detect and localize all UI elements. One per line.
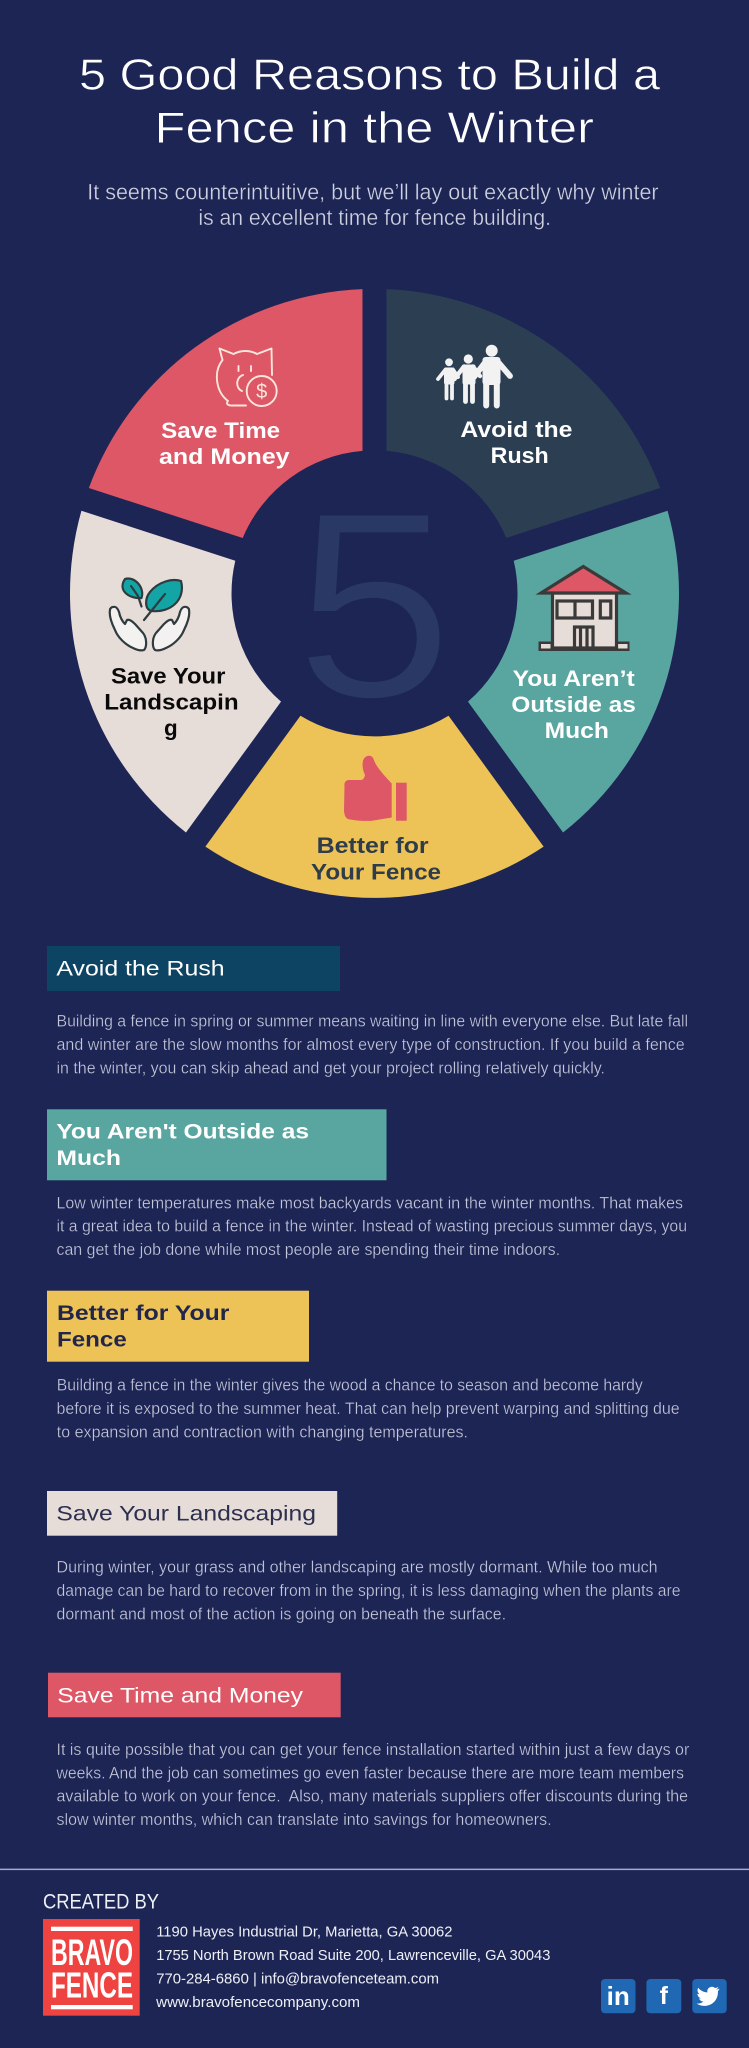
title: Fence in the Winter (154, 104, 594, 153)
text: you aren't outside as much: can get the job done while most people are spending their time indoors. (56, 1240, 560, 1259)
icon: piggy bank with coin (217, 348, 277, 406)
section: save your landscaping (47, 1491, 680, 1623)
label: save your landscaping: g (164, 716, 178, 740)
icon: twitter (692, 1979, 727, 2013)
section: avoid the rush (47, 946, 688, 1077)
heading: better for your fence: Better for Your (57, 1301, 230, 1325)
text: save your landscaping: During winter, your grass and other landscaping are mostly dormant. While too much (56, 1558, 658, 1577)
subtitle (87, 179, 659, 230)
heading: you aren't outside as much (47, 1109, 386, 1180)
text: you aren't outside as much: it a great idea to build a fence in the winter. Instead of wasting precious summer days, you (56, 1217, 687, 1236)
heading: you aren't outside as much: You Aren't Outside as (56, 1119, 309, 1143)
text: save time and money: available to work on your fence. Also, many materials suppliers offer discounts during the (56, 1787, 688, 1806)
section: better for your fence (47, 1291, 680, 1442)
text: avoid the rush: Building a fence in spring or summer means waiting in line with everyone else. But late fall (56, 1012, 688, 1031)
text: better for your fence (56, 1376, 680, 1442)
section: save time and money (48, 1673, 690, 1829)
label: you aren't outside as much: Outside as (511, 692, 636, 717)
label: you aren't outside as much: Much (545, 718, 609, 743)
label: avoid the rush: Rush (491, 443, 549, 468)
label: better for your fence: Better for (317, 833, 429, 858)
wheel slice: better for your fence (176, 645, 544, 1007)
icon: facebook: f (660, 1982, 669, 2010)
heading: save time and money (48, 1673, 341, 1717)
text: avoid the rush (56, 1012, 688, 1077)
subtitle: It seems counterintuitive, but we’ll lay out exactly why winter (87, 179, 659, 204)
text: better for your fence: before it is exposed to the summer heat. That can help prevent warping and splitting due (56, 1399, 680, 1418)
wheel slice: save your landscaping (0, 470, 332, 832)
text: better for your fence: to expansion and contraction with changing temperatures. (57, 1423, 468, 1442)
contact details (155, 1924, 550, 2011)
label: better for your fence: Your Fence (311, 860, 441, 884)
icon: thumbs up (344, 756, 407, 821)
label: save time and money: Save Time (161, 418, 280, 443)
label: save time and money: and Money (159, 444, 290, 469)
icon: family (438, 345, 510, 406)
text: save your landscaping: damage can be hard to recover from in the spring, it is less damaging when the plants are (56, 1581, 680, 1600)
text: you aren't outside as much: Low winter temperatures make most backyards vacant in the winter months. That makes (56, 1193, 683, 1212)
heading: save your landscaping (47, 1491, 337, 1536)
text: save time and money: It is quite possible that you can get your fence installation started within just a few days or (56, 1740, 690, 1759)
icon: linkedin: in (607, 1981, 630, 2011)
heading: avoid the rush: Avoid the Rush (56, 957, 225, 981)
label: save time and money (159, 418, 290, 469)
logo: bravo fence: FENCE (51, 1964, 133, 2006)
wheel slice: you aren't outside as much (431, 511, 749, 848)
title: 5 Good Reasons to Build a (79, 50, 661, 100)
label: avoid the rush (460, 417, 572, 468)
text: better for your fence: Building a fence in the winter gives the wood a chance to season and become hardy (57, 1376, 643, 1395)
icon: hands and leaves (110, 579, 189, 650)
footer (43, 1891, 727, 2016)
wheel slice: avoid the rush (386, 289, 660, 538)
title (79, 50, 661, 153)
text: avoid the rush: in the winter, you can skip ahead and get your project rolling relatively quickly. (56, 1058, 605, 1077)
label: save your landscaping (104, 663, 239, 740)
heading: save your landscaping: Save Your Landscaping (56, 1502, 316, 1526)
section: you aren't outside as much (47, 1109, 687, 1259)
text: save time and money: weeks. And the job can sometimes go even faster because there are more team members (56, 1763, 684, 1782)
text: save time and money (56, 1740, 690, 1829)
icon: house (538, 566, 630, 651)
logo: bravo fence: BRAVO (51, 1932, 133, 1973)
text: you aren't outside as much (56, 1193, 687, 1259)
text: save your landscaping: dormant and most of the action is going on beneath the surface. (56, 1604, 506, 1623)
wheel diagram (0, 228, 749, 1007)
logo: bravo fence (43, 1919, 140, 2016)
heading: you aren't outside as much: Much (56, 1146, 121, 1170)
heading: better for your fence (47, 1291, 309, 1362)
heading: avoid the rush (47, 946, 340, 991)
heading: save time and money: Save Time and Money (57, 1683, 303, 1707)
label: save your landscaping: Landscapin (104, 690, 239, 714)
icon: linkedin (601, 1979, 636, 2013)
label: save your landscaping: Save Your (111, 663, 226, 688)
big number 5: 5 (295, 457, 453, 754)
text: avoid the rush: and winter are the slow months for almost every type of construction. If you build a fence (56, 1035, 685, 1054)
wheel slice: save time and money (89, 228, 410, 565)
icon: piggy bank with coin: $ (256, 381, 267, 403)
heading: better for your fence: Fence (57, 1328, 127, 1352)
contact details: 1190 Hayes Industrial Dr, Marietta, GA 30062 (156, 1924, 452, 1941)
contact details: www.bravofencecompany.com (155, 1994, 360, 2011)
text: save time and money: slow winter months, which can translate into savings for homeowners. (56, 1810, 552, 1829)
subtitle: is an excellent time for fence building. (198, 205, 551, 230)
label: better for your fence (311, 833, 441, 884)
label: avoid the rush: Avoid the (460, 417, 572, 442)
created by: CREATED BY (43, 1891, 159, 1914)
contact details: 770-284-6860 | info@bravofenceteam.com (156, 1971, 439, 1988)
label: you aren't outside as much: You Aren’t (513, 666, 635, 691)
label: you aren't outside as much (511, 666, 636, 743)
icon: facebook (646, 1979, 681, 2013)
contact details: 1755 North Brown Road Suite 200, Lawrenceville, GA 30043 (156, 1947, 550, 1964)
text: save your landscaping (56, 1558, 680, 1623)
